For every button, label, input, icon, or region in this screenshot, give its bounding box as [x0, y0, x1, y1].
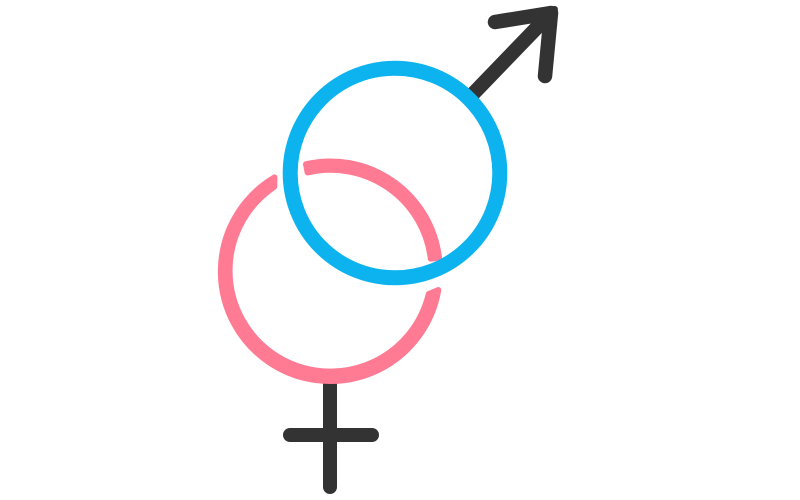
icon: male arrow [470, 9, 555, 97]
icon: blue male ring [290, 68, 500, 278]
icon: pink female ring [221, 161, 439, 381]
icon: female cross [290, 382, 372, 487]
